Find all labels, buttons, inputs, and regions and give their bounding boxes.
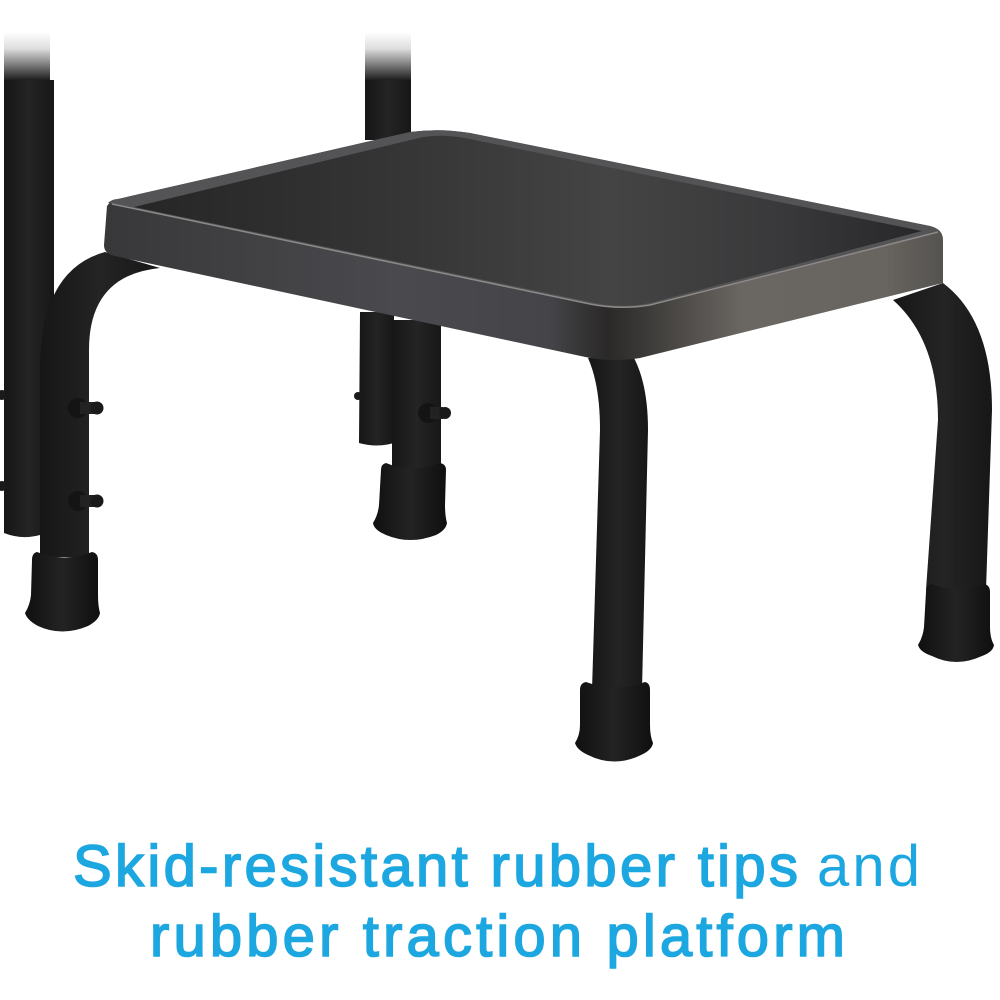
centre front leg with rubber tip <box>575 358 653 762</box>
caption: and <box>817 834 920 899</box>
caption: rubber traction platform <box>150 904 845 969</box>
back leg with rubber tip <box>373 320 451 540</box>
left front leg with rubber tip <box>25 252 160 632</box>
caption: Skid-resistant rubber tips <box>73 834 798 899</box>
raised rim <box>108 130 940 308</box>
caption <box>73 834 920 969</box>
step platform frame <box>104 130 943 360</box>
handrail post left <box>0 32 54 537</box>
right rear leg with rubber tip <box>893 283 994 662</box>
handrail post right <box>354 32 411 446</box>
bolts <box>68 398 104 511</box>
front rim highlight <box>112 204 938 307</box>
rubber traction mat <box>134 136 922 306</box>
bolt <box>418 403 451 423</box>
